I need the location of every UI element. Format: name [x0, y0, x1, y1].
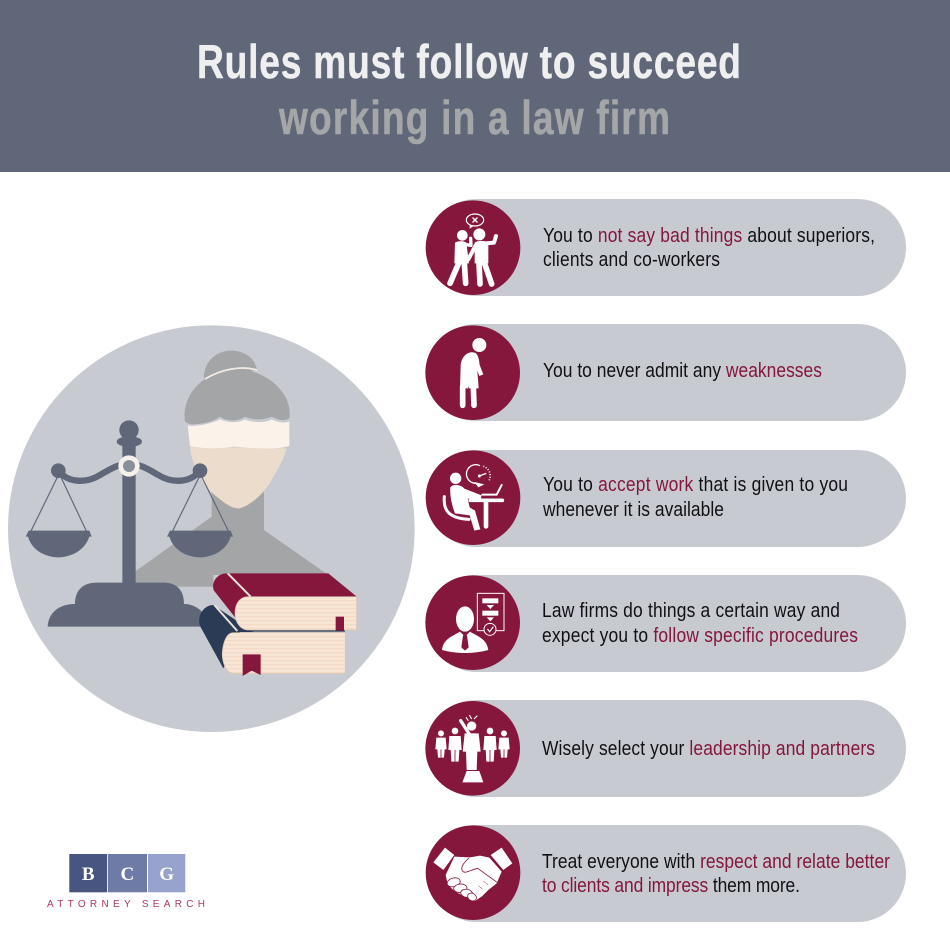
text: rule 1 — [543, 225, 875, 271]
text: rule 5: Wisely select your leadership and partners — [542, 738, 875, 760]
text: rule 3: You to accept work that is given to you — [543, 474, 848, 496]
logo: BCG Attorney Search: C — [121, 864, 134, 885]
text: rule 6 — [542, 851, 891, 897]
pill: rule 1 — [428, 199, 906, 296]
icon: two people gossiping — [426, 200, 520, 295]
pill: rule 6 — [428, 825, 906, 922]
icon: lady justice — [135, 351, 328, 587]
text: rule 3: whenever it is available — [542, 499, 724, 521]
text: rule 6: to clients and impress them more. — [542, 875, 800, 897]
logo: BCG Attorney Search: G — [159, 864, 174, 885]
text: rule 1: clients and co-workers — [543, 249, 720, 271]
subtitle: working in a law firm — [278, 92, 670, 144]
text: rule 3 — [542, 474, 848, 521]
text: rule 4: Law firms do things a certain way and — [542, 600, 840, 622]
logo: BCG Attorney Search: ATTORNEY SEARCH — [47, 899, 205, 910]
icon: stacked books — [199, 573, 357, 676]
text: rule 1: You to not say bad things about superiors, — [543, 225, 875, 247]
text: rule 4 — [542, 600, 858, 647]
text: rule 6: Treat everyone with respect and relate better — [542, 851, 891, 873]
logo: BCG Attorney Search: B — [82, 864, 95, 885]
pill: rule 4 — [428, 575, 906, 672]
icon: leader on pedestal with team — [425, 701, 520, 796]
text: rule 2: You to never admit any weaknesses — [543, 360, 822, 382]
logo: BCG Attorney Search — [47, 854, 205, 910]
text: rule 4: expect you to follow specific procedures — [542, 625, 858, 647]
icon: slumped person — [425, 325, 520, 420]
icon: businessman with procedure chart — [425, 575, 520, 670]
icon: handshake — [426, 825, 520, 920]
icon: scales of justice — [26, 420, 233, 627]
pill: rule 5 — [428, 700, 906, 797]
pill: rule 3 — [428, 450, 906, 547]
header banner — [0, 0, 950, 172]
icon: person working at desk with timer — [426, 450, 520, 545]
title: Rules must follow to succeed — [197, 36, 741, 88]
illustration: lady justice and scales — [8, 325, 415, 732]
pill: rule 2 — [428, 324, 906, 421]
